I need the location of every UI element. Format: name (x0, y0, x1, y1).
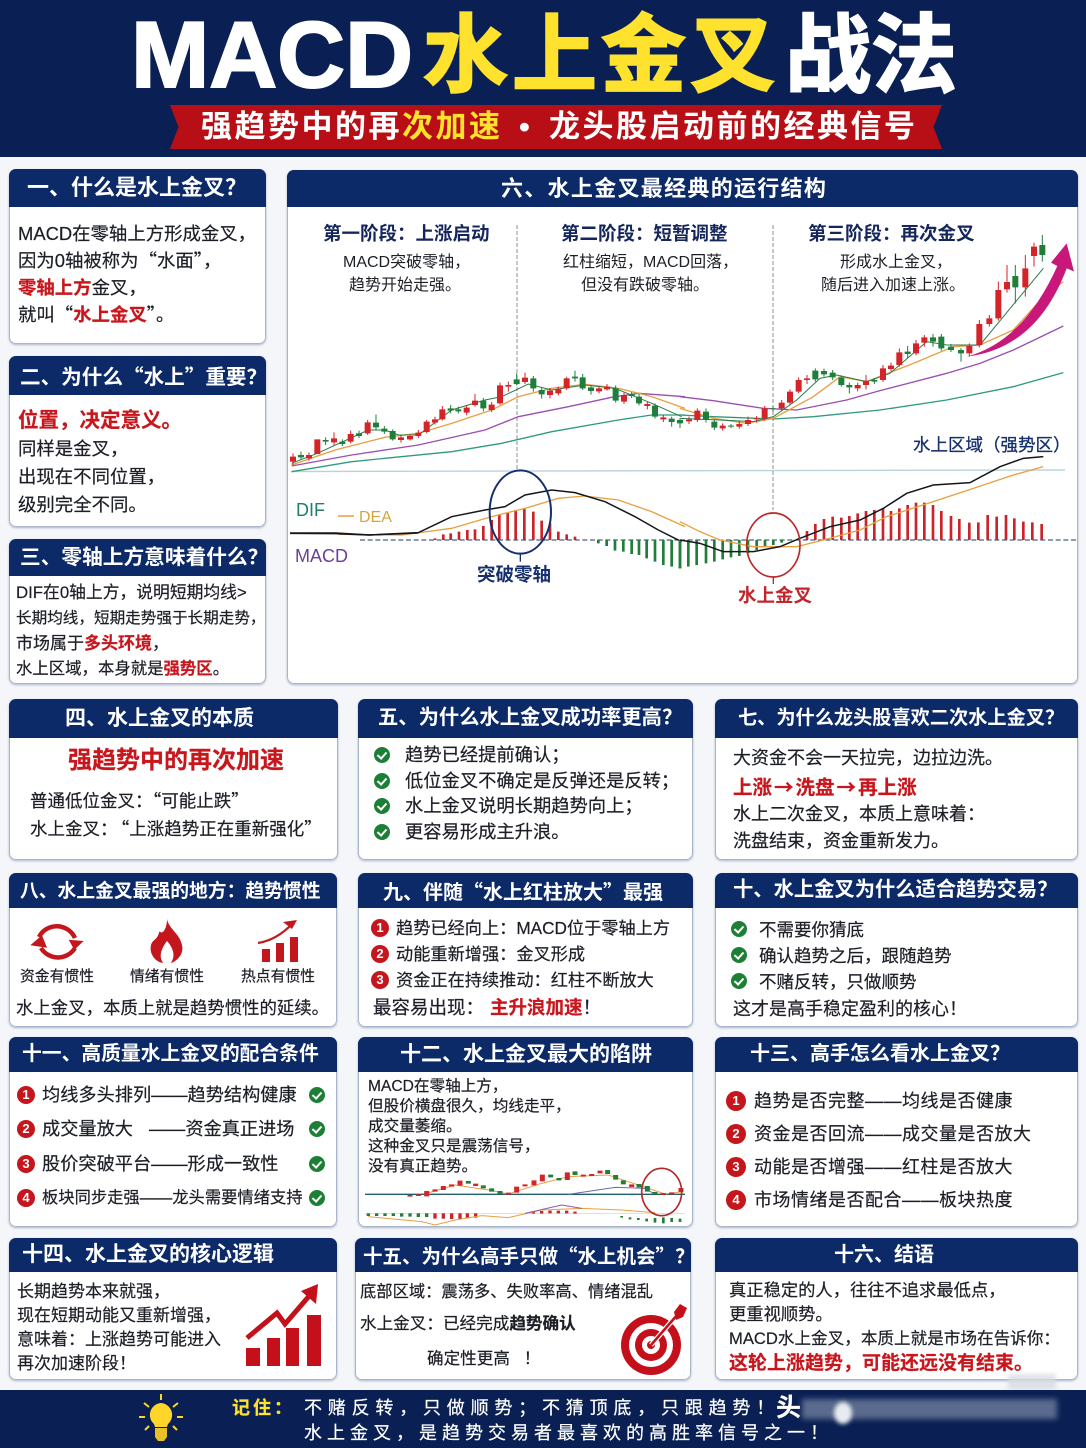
numbered list (371, 918, 670, 990)
key message: 这轮上涨趋势，可能还远没有结束。 (729, 1353, 1033, 1374)
numbered list: 趋势已经向上：MACD位于零轴上方 (396, 918, 670, 938)
text block: MACD在零轴上方， 但股价横盘很久，均线走平， 成交量萎缩。 这种金叉只是震荡信号， 没有真正趋势。 (368, 1078, 571, 1175)
stage labels: 趋势开始走强。 (349, 276, 461, 294)
numbered list: 3 (732, 1159, 740, 1174)
panel: 十五 水上机会 (355, 1238, 691, 1380)
heading: 十四、水上金叉的核心逻辑 (22, 1243, 274, 1266)
heading (715, 699, 1078, 738)
panel: 十四 核心逻辑 (9, 1238, 337, 1380)
condition list: 1 (22, 1087, 30, 1102)
subtitle ribbon: 龙头股启动前的经典信号 (549, 109, 918, 144)
chart: candlesticks and MACD: DEA (359, 509, 392, 526)
chart: candlesticks and MACD: MACD (295, 546, 348, 566)
reminder label: 记住： (232, 1398, 295, 1418)
condition list: 成交量放大 ——资金真正进场 (42, 1119, 294, 1139)
heading (9, 699, 338, 738)
acceleration arrow (967, 243, 1074, 357)
heading (715, 1238, 1078, 1272)
key message: 上涨→洗盘→再上涨 (733, 771, 917, 800)
text block: 水上二次金叉，本质上意味着： 洗盘结束，资金重新发力。 (733, 804, 985, 851)
checklist: 低位金叉不确定是反弹还是反转； (405, 770, 679, 791)
heading (358, 873, 693, 908)
text block: 同样是金叉， 出现在不同位置， 级别完全不同。 (18, 438, 165, 515)
heading: 四、水上金叉的本质 (65, 707, 254, 730)
stage labels: 第三阶段：再次金叉 (808, 223, 975, 244)
mini chart (365, 1168, 685, 1226)
condition list: 3 (22, 1156, 30, 1171)
title: 水上金叉 (423, 9, 779, 104)
stage labels: 形成水上金叉， (840, 253, 952, 271)
key message: 位置，决定意义。 (18, 409, 182, 432)
MACD right (680, 538, 1077, 541)
watermark (1008, 1374, 1056, 1390)
checklist: 水上金叉说明长期趋势向上； (405, 795, 643, 816)
golden cross circle (747, 513, 800, 577)
checklist: 确认趋势之后，跟随趋势 (759, 946, 952, 966)
title: 战法 (785, 8, 957, 104)
numbered list: 2 (376, 946, 384, 961)
heading: 十五、为什么高手只做“水上机会”？ (363, 1240, 691, 1269)
condition list: 板块同步走强——龙头需要情绪支持 (42, 1189, 303, 1207)
numbered list: 1 (732, 1093, 740, 1108)
numbered list: 动能重新增强：金叉形成 (396, 944, 585, 964)
heading: 八、水上金叉最强的地方：趋势惯性 (20, 880, 320, 901)
header banner (0, 0, 1086, 157)
text block: MACD在零轴上方形成金叉， 因为0轴被称为“水面”， 零轴上方金叉， 就叫“水上金叉”。 (18, 223, 256, 327)
heading: 九、伴随“水上红柱放大”最强 (383, 876, 663, 905)
MACD left (360, 538, 685, 541)
text block: 大资金不会一天拉完，边拉边洗。 (733, 748, 1003, 768)
text block: 普通低位金叉：“可能止跌” 水上金叉：“上涨趋势正在重新强化” (30, 788, 322, 841)
stage labels: 第一阶段：上涨启动 (323, 223, 490, 244)
numbered list (726, 1091, 1032, 1210)
heading: 十六、结语 (834, 1244, 934, 1266)
heading (715, 1037, 1078, 1072)
checklist (374, 744, 679, 842)
chart: candlesticks and MACD: 突破零轴 (477, 564, 551, 585)
heading: 十一、高质量水上金叉的配合条件 (22, 1043, 319, 1065)
numbered list: 3 (376, 972, 384, 987)
heading: 十三、高手怎么看水上金叉？ (750, 1043, 1010, 1065)
stage dividers (517, 225, 773, 510)
icon labels: 热点有惯性 (241, 969, 315, 985)
panel: 十二 最大的陷阱 (358, 1037, 693, 1227)
text block: 长期趋势本来就强， 现在短期动能又重新增强， 意味着：上涨趋势可能进入 再次加速阶段！ (17, 1282, 221, 1373)
checklist (731, 920, 952, 992)
icon: cycle (30, 924, 84, 960)
icon: rising chart (246, 1284, 321, 1366)
panel: 四 水上金叉的本质 (9, 699, 338, 860)
heading: 七、为什么龙头股喜欢二次水上金叉？ (738, 708, 1064, 729)
chart: candlesticks and MACD: 水上金叉 (738, 585, 813, 606)
heading: 十、水上金叉为什么适合趋势交易？ (733, 879, 1058, 901)
numbered list: 市场情绪是否配合——板块热度 (754, 1190, 1013, 1210)
panel: 十 适合趋势交易 (715, 873, 1078, 1027)
icon: rising bars (258, 920, 298, 962)
panel: 九 水上红柱放大 (358, 873, 693, 1027)
heading (9, 1037, 337, 1072)
subtitle ribbon: 强趋势中的再次加速 (201, 109, 502, 144)
text block: 水上金叉，本质上就是趋势惯性的延续。 (16, 998, 329, 1018)
icon: target (621, 1304, 687, 1375)
stage labels: 随后进入加速上涨。 (821, 276, 965, 294)
footer banner (0, 1390, 1086, 1448)
stage labels: 但没有跌破零轴。 (581, 276, 709, 294)
subtitle ribbon (170, 105, 942, 149)
title: MACD (131, 2, 413, 107)
condition list: 4 (22, 1190, 30, 1205)
text block: DIF在0轴上方，说明短期均线> 长期均线，短期走势强于长期走势， 市场属于多头环境， 水上区域，本身就是强势区。 (16, 583, 266, 678)
numbered list: 2 (732, 1126, 740, 1141)
heading: 五、为什么水上金叉成功率更高？ (378, 707, 682, 729)
heading (358, 1037, 693, 1072)
checklist: 不需要你猜底 (759, 920, 864, 940)
text block: 水上金叉：已经完成趋势确认 (360, 1314, 576, 1333)
condition list: 均线多头排列——趋势结构健康 (42, 1085, 297, 1105)
icon labels: 情绪有惯性 (130, 969, 204, 985)
panel: 八 趋势惯性 (9, 873, 337, 1027)
panel: 五 为什么成功率更高 (358, 699, 693, 860)
numbered list: 动能是否增强——红柱是否放大 (754, 1157, 1013, 1177)
condition list: 股价突破平台——形成一致性 (42, 1154, 278, 1174)
reminder text: 不赌反转，只做顺势；不猜顶底，只跟趋势！ 水上金叉，是趋势交易者最喜欢的高胜率信号之一！ (304, 1398, 833, 1443)
icon: light bulb (139, 1394, 183, 1441)
heading: 六、水上金叉最经典的运行结构 (501, 176, 827, 201)
panel: 十六 结语 (715, 1238, 1078, 1380)
price chart right part (680, 235, 1077, 584)
panel: 六 运行结构 (287, 170, 1078, 684)
numbered list: 趋势是否完整——均线是否健康 (754, 1091, 1013, 1111)
subtitle ribbon: • (519, 109, 532, 144)
heading (9, 169, 266, 207)
icon labels: 资金有惯性 (20, 969, 94, 985)
stage labels: MACD突破零轴， (343, 253, 470, 271)
heading (287, 170, 1078, 207)
condition list (17, 1085, 325, 1207)
heading: 十二、水上金叉最大的陷阱 (400, 1043, 652, 1066)
chart labels: DIF (296, 500, 325, 520)
obscured watermark text (776, 1394, 1060, 1428)
heading: 二、为什么“水上”重要？ (20, 360, 266, 390)
checklist: 趋势已经提前确认； (405, 744, 570, 765)
stage labels: 红柱缩短，MACD回落， (563, 253, 738, 271)
heading (9, 1238, 337, 1272)
heading (9, 539, 266, 576)
numbered list: 1 (376, 920, 384, 935)
heading: 三、零轴上方意味着什么？ (20, 546, 266, 569)
key message: 强趋势中的再次加速 (68, 747, 284, 774)
panel: 二 为什么水上重要 (9, 356, 266, 527)
panel: 七 龙头股二次水上金叉 (715, 699, 1078, 860)
axis line (291, 470, 1065, 472)
checklist: 不赌反转，只做顺势 (759, 972, 916, 992)
breakout circle (490, 470, 551, 554)
panel: 一 什么是水上金叉 (9, 169, 266, 344)
stage labels (323, 223, 975, 294)
obscured watermark text: 头 (776, 1394, 801, 1422)
DIF lead-in line (290, 533, 418, 535)
chart: candlesticks and MACD (290, 223, 1076, 606)
chart: candlesticks and MACD: 水上区域（强势区） (913, 435, 1070, 455)
numbered list: 资金正在持续推动：红柱不断放大 (396, 970, 654, 990)
text block: 真正稳定的人，往往不追求最低点， 更重视顺势。 MACD水上金叉，本质上就是市场在告诉你： (729, 1280, 1060, 1348)
condition list: 2 (22, 1121, 30, 1136)
heading (9, 873, 337, 908)
title (131, 2, 957, 107)
panel: 十一 配合条件 (9, 1037, 337, 1227)
icon labels (20, 968, 315, 985)
heading (715, 873, 1078, 908)
conclusion: 最容易出现： 主升浪加速！ (373, 997, 601, 1018)
price chart left part (290, 371, 685, 568)
checklist: 更容易形成主升浪。 (405, 821, 570, 842)
stage labels: 第二阶段：短暂调整 (561, 223, 728, 244)
icon: flame (150, 919, 182, 963)
panel: 十三 高手怎么看 (715, 1037, 1078, 1227)
text block: 底部区域：震荡多、失败率高、情绪混乱 (360, 1283, 653, 1301)
heading (358, 699, 693, 738)
numbered list: 4 (732, 1192, 740, 1207)
conclusion: 这才是高手稳定盈利的核心！ (733, 999, 967, 1019)
heading: 一、什么是水上金叉？ (27, 175, 247, 200)
panel: 三 零轴上方意味着什么 (9, 539, 266, 684)
text block: 确定性更高 ！ (427, 1349, 540, 1368)
numbered list: 资金是否回流——成交量是否放大 (754, 1124, 1032, 1144)
